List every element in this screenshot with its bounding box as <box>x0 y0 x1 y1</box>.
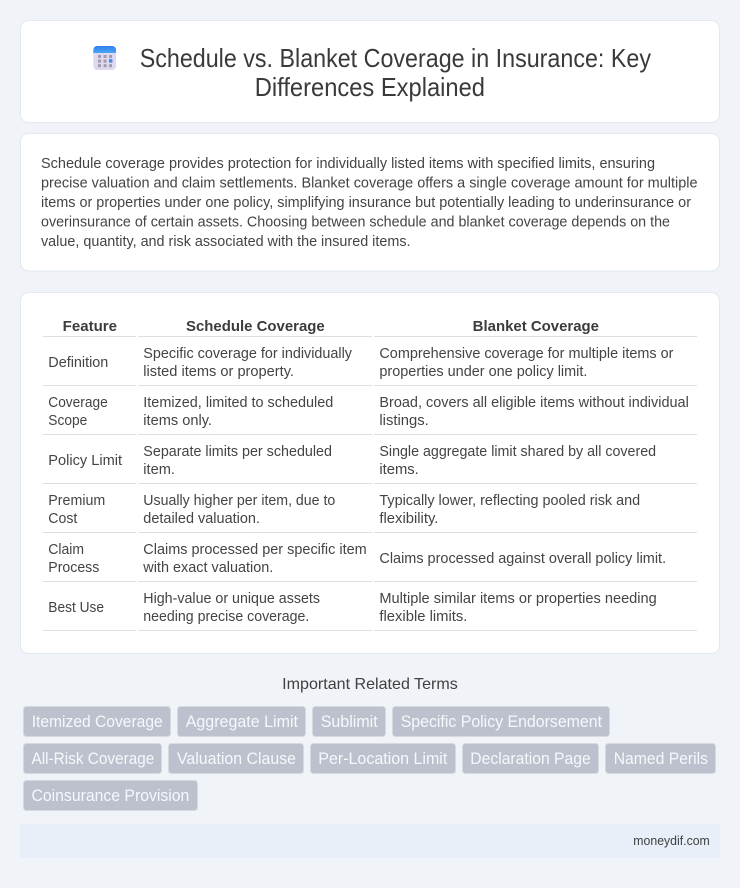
table row: claim process: Process <box>48 560 99 576</box>
table row: best use <box>43 591 697 631</box>
table row: policy limit: Single aggregate limit shared by all covered <box>379 444 656 460</box>
panel: summary <box>20 134 720 271</box>
table row: premium cost: Cost <box>48 511 77 527</box>
table row: premium cost: Typically lower, reflecting pooled risk and <box>379 493 640 509</box>
table row: policy limit: item. <box>143 462 175 478</box>
table row: premium cost <box>43 493 697 533</box>
table header row: Schedule Coverage <box>186 319 325 335</box>
summary text: value, quantity, and risk associated with the insured items. <box>41 234 410 250</box>
table header row <box>43 319 697 337</box>
chip: all-risk coverage: All-Risk Coverage <box>32 750 154 768</box>
title: Differences Explained <box>255 72 485 102</box>
table row: policy limit: Separate limits per scheduled <box>143 444 332 460</box>
table row: definition: Specific coverage for individually <box>143 346 353 362</box>
table row: best use: Multiple similar items or properties needing <box>379 591 657 607</box>
summary text <box>41 156 698 250</box>
chip: specific policy endorsement: Specific Policy Endorsement <box>401 713 602 731</box>
chip: per-location limit: Per-Location Limit <box>318 750 448 768</box>
table row: policy limit: items. <box>379 462 419 478</box>
table header row: Feature <box>63 319 117 335</box>
table row: definition: listed items or property. <box>143 364 294 380</box>
table row: coverage scope: Coverage <box>48 395 108 411</box>
chip: named perils <box>606 744 716 774</box>
heading: important related terms: Important Related Terms <box>282 676 458 693</box>
summary text: items or properties under one policy, simplifying insurance but potentially leading to underinsurance or <box>41 195 691 211</box>
table row: coverage scope: items only. <box>143 413 212 429</box>
related terms chips <box>24 706 716 810</box>
table row: premium cost: Premium <box>48 493 105 509</box>
table row: coverage scope <box>43 395 697 435</box>
chip: coinsurance provision <box>24 780 198 810</box>
table row: definition <box>43 346 697 386</box>
table row: premium cost: detailed valuation. <box>143 511 260 527</box>
footer bar: moneydif.com <box>633 833 710 848</box>
title: Schedule vs. Blanket Coverage in Insurance: Key <box>140 43 651 73</box>
table row: best use: Best Use <box>48 600 104 616</box>
table row: policy limit <box>43 444 697 484</box>
chip: aggregate limit: Aggregate Limit <box>186 713 298 731</box>
table row: premium cost: Usually higher per item, due to <box>143 493 335 509</box>
table row: claim process: Claim <box>48 542 84 558</box>
chip: named perils: Named Perils <box>614 750 708 768</box>
table row: definition: properties under one policy limit. <box>379 364 587 380</box>
chip: coinsurance provision: Coinsurance Provision <box>32 787 189 805</box>
table row: coverage scope: Itemized, limited to scheduled <box>143 395 333 411</box>
chip: specific policy endorsement <box>392 706 610 736</box>
chip: all-risk coverage <box>24 744 162 774</box>
table row: claim process: with exact valuation. <box>142 560 273 576</box>
table header row: Blanket Coverage <box>473 319 599 335</box>
chip: sublimit <box>312 706 386 736</box>
table row: coverage scope: Broad, covers all eligible items without individual <box>379 395 689 411</box>
table row: coverage scope: Scope <box>48 413 87 429</box>
icon: calendar <box>93 46 116 70</box>
chip: valuation clause: Valuation Clause <box>177 750 296 768</box>
summary text: overinsurance of certain assets. Choosing between schedule and blanket coverage depends on the <box>41 214 670 230</box>
chip: aggregate limit <box>178 706 306 736</box>
chip: sublimit: Sublimit <box>321 713 378 731</box>
table row: best use: flexible limits. <box>379 609 467 625</box>
chip: itemized coverage <box>24 706 170 736</box>
table row: premium cost: flexibility. <box>379 511 438 527</box>
title <box>140 43 651 102</box>
chip: declaration page: Declaration Page <box>470 750 591 768</box>
chip: valuation clause <box>168 744 304 774</box>
panel: comparison table <box>20 292 720 654</box>
chip: itemized coverage: Itemized Coverage <box>32 713 163 731</box>
footer bar <box>20 824 720 858</box>
table row: policy limit: Policy Limit <box>48 453 122 469</box>
table row: claim process <box>43 542 697 582</box>
chip: per-location limit <box>310 744 456 774</box>
panel: header <box>20 20 720 122</box>
table row: claim process: Claims processed per specific item <box>143 542 367 558</box>
table row: definition: Definition <box>48 355 108 371</box>
summary text: Schedule coverage provides protection for individually listed items with specified limits, ensuring <box>41 156 655 172</box>
table row: best use: needing precise coverage. <box>143 609 309 625</box>
table row: claim process: Claims processed against overall policy limit. <box>379 551 666 567</box>
table row: definition: Comprehensive coverage for multiple items or <box>379 346 674 362</box>
table row: coverage scope: listings. <box>379 413 429 429</box>
table row: best use: High-value or unique assets <box>143 591 320 607</box>
summary text: precise valuation and claim settlements. Blanket coverage offers a single coverage amount for multiple <box>41 176 698 192</box>
chip: declaration page <box>462 744 598 774</box>
